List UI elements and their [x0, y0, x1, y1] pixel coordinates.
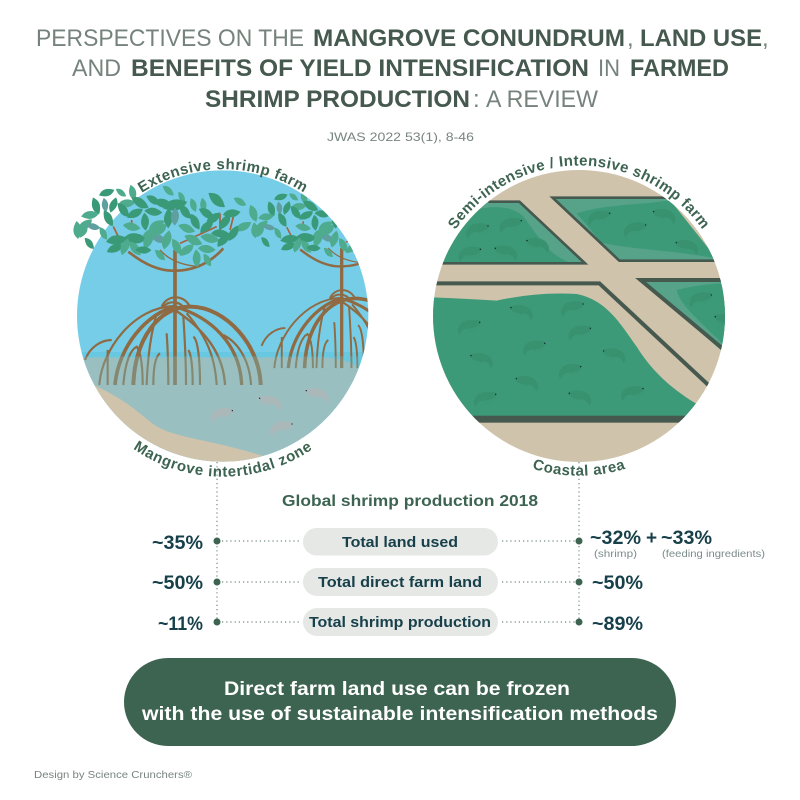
row: total direct farm land: ~50% — [592, 573, 643, 594]
title: FARMED — [630, 55, 729, 82]
title: MANGROVE CONUNDRUM — [313, 25, 625, 52]
row: total shrimp production: ~89% — [592, 614, 643, 635]
title: IN — [598, 55, 620, 82]
row: total land used: ~35% — [152, 533, 203, 554]
journal citation: JWAS 2022 53(1), 8-46 — [327, 130, 474, 144]
comparison connectors — [217, 462, 579, 622]
title: , — [627, 25, 634, 52]
mud and water — [83, 357, 359, 462]
row: total land used: (shrimp) — [594, 549, 637, 560]
row: total direct farm land: Total direct farm land — [318, 574, 482, 591]
title: , — [762, 25, 769, 52]
right tree crown — [251, 193, 359, 268]
row: total direct farm land — [152, 568, 643, 596]
mangrove roots above water — [85, 248, 368, 357]
row: total land used: (feeding ingredients) — [662, 549, 765, 560]
row: total direct farm land: ~50% — [152, 573, 203, 594]
pond bank line — [433, 283, 708, 385]
title: AND — [72, 55, 121, 82]
pond top left — [430, 202, 585, 263]
pond top right — [553, 198, 717, 261]
label: Extensive shrimp farm: Extensive shrimp farm — [137, 158, 306, 192]
callout: with the use of sustainable intensification methods — [141, 704, 658, 725]
title: BENEFITS OF YIELD INTENSIFICATION — [131, 55, 589, 82]
title: : — [473, 86, 480, 113]
pond shrimps — [458, 209, 737, 407]
label: Coastal area: Coastal area — [534, 460, 626, 476]
row: total shrimp production: Total shrimp production — [309, 614, 491, 631]
sand bank — [94, 386, 263, 462]
panel: semi-intensive and intensive shrimp farm illustration — [433, 170, 725, 462]
comparison table heading: Global shrimp production 2018 — [282, 493, 538, 510]
panel: extensive shrimp farm illustration — [73, 170, 368, 462]
shrimps — [210, 388, 328, 437]
left tree crown — [73, 184, 260, 268]
label: Mangrove intertidal zone: Mangrove intertidal zone — [134, 440, 312, 477]
row: total land used: ~33% — [661, 528, 712, 549]
row: total shrimp production: ~11% — [158, 614, 203, 635]
title: SHRIMP PRODUCTION — [205, 86, 470, 113]
row: total land used: + — [646, 528, 657, 549]
title: LAND USE — [640, 25, 762, 52]
row: total land used — [152, 528, 765, 560]
title — [36, 25, 769, 113]
pond bottom edge — [467, 416, 690, 423]
large pond — [427, 294, 698, 420]
title: A REVIEW — [486, 86, 598, 113]
label: Semi-intensive / Intensive shrimp farm: Semi-intensive / Intensive shrimp farm — [448, 156, 708, 229]
title: PERSPECTIVES ON THE — [36, 25, 304, 52]
row: total shrimp production — [158, 608, 643, 636]
pond right — [640, 280, 728, 357]
mangrove roots under water — [84, 356, 358, 386]
callout — [124, 658, 676, 746]
row: total land used: ~32% — [590, 528, 641, 549]
callout: Direct farm land use can be frozen — [224, 679, 570, 700]
row: total land used: Total land used — [342, 534, 458, 551]
credit: Design by Science Crunchers® — [34, 769, 192, 781]
